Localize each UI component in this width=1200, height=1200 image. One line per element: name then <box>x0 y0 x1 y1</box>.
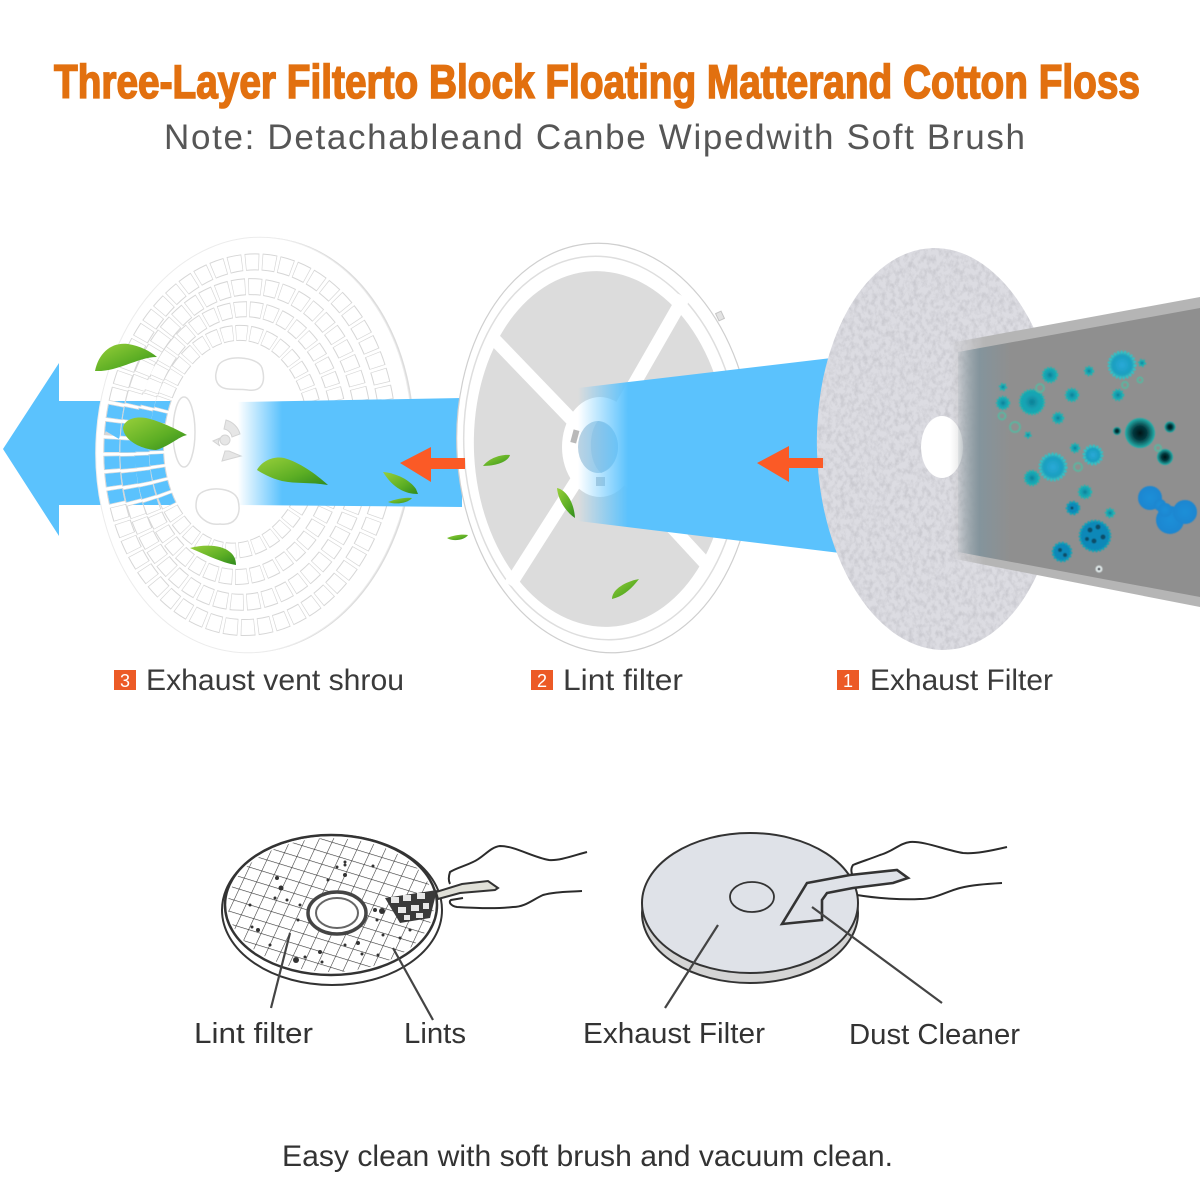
lint specks <box>248 860 412 964</box>
blue airflow band between filters <box>238 398 462 507</box>
leader line: lint filter <box>271 933 290 1008</box>
flying leaves <box>95 344 639 599</box>
footer note: Easy clean with soft brush and vacuum clean. <box>282 1140 893 1173</box>
filter hub outline <box>730 882 774 912</box>
large blue output arrow <box>3 363 110 536</box>
hand outline <box>851 842 1007 899</box>
orange flow arrow left <box>400 447 465 482</box>
lint filter hub ring <box>308 892 366 934</box>
subtitle note: Note: Detachableand Canbe Wipedwith Soft Brush <box>164 118 1025 157</box>
label: exhaust vent shroud: Exhaust vent shrou <box>146 664 404 697</box>
shroud bottom opening <box>196 489 239 524</box>
hand outline <box>449 846 587 908</box>
grey exhaust air beam <box>950 297 1200 607</box>
shroud top opening <box>216 358 263 390</box>
brush head <box>385 890 437 923</box>
shroud centre clip <box>213 420 241 461</box>
label: lint filter: 2 <box>537 671 547 691</box>
leader line: exhaust filter <box>665 925 718 1008</box>
lint filter hub <box>562 397 638 497</box>
illustration: cleaning lint filter with brush <box>222 835 587 985</box>
caption: exhaust filter: Exhaust Filter <box>583 1018 765 1050</box>
caption: dust cleaner: Dust Cleaner <box>849 1019 1020 1051</box>
mesh grid <box>228 838 434 972</box>
label: exhaust vent shroud: 3 <box>120 671 130 691</box>
brush handle <box>436 881 498 899</box>
dust cloth <box>782 870 908 924</box>
filter centre hole <box>921 416 963 478</box>
label: lint filter: Lint filter <box>563 664 683 697</box>
virus and dust particles <box>997 352 1197 572</box>
panel: lint filter disc <box>443 233 767 663</box>
leader line: dust cleaner <box>812 907 942 1003</box>
panel: exhaust vent shroud disc <box>95 236 412 654</box>
caption: lints: Lints <box>404 1018 466 1050</box>
panel: exhaust filter disc <box>816 248 1037 650</box>
caption: lint filter: Lint filter <box>194 1018 313 1050</box>
orange flow arrow right <box>757 446 823 482</box>
label: exhaust filter: Exhaust Filter <box>870 664 1053 697</box>
lint filter spokes <box>495 297 705 585</box>
shroud left opening <box>173 397 195 467</box>
illustration: wiping exhaust filter with cloth <box>642 833 1007 983</box>
label: exhaust filter: 1 <box>843 671 853 691</box>
shroud hub <box>170 365 286 517</box>
lint mesh <box>465 265 737 633</box>
blue airflow beam from exhaust filter <box>578 357 840 553</box>
leader line: lints <box>393 948 433 1020</box>
